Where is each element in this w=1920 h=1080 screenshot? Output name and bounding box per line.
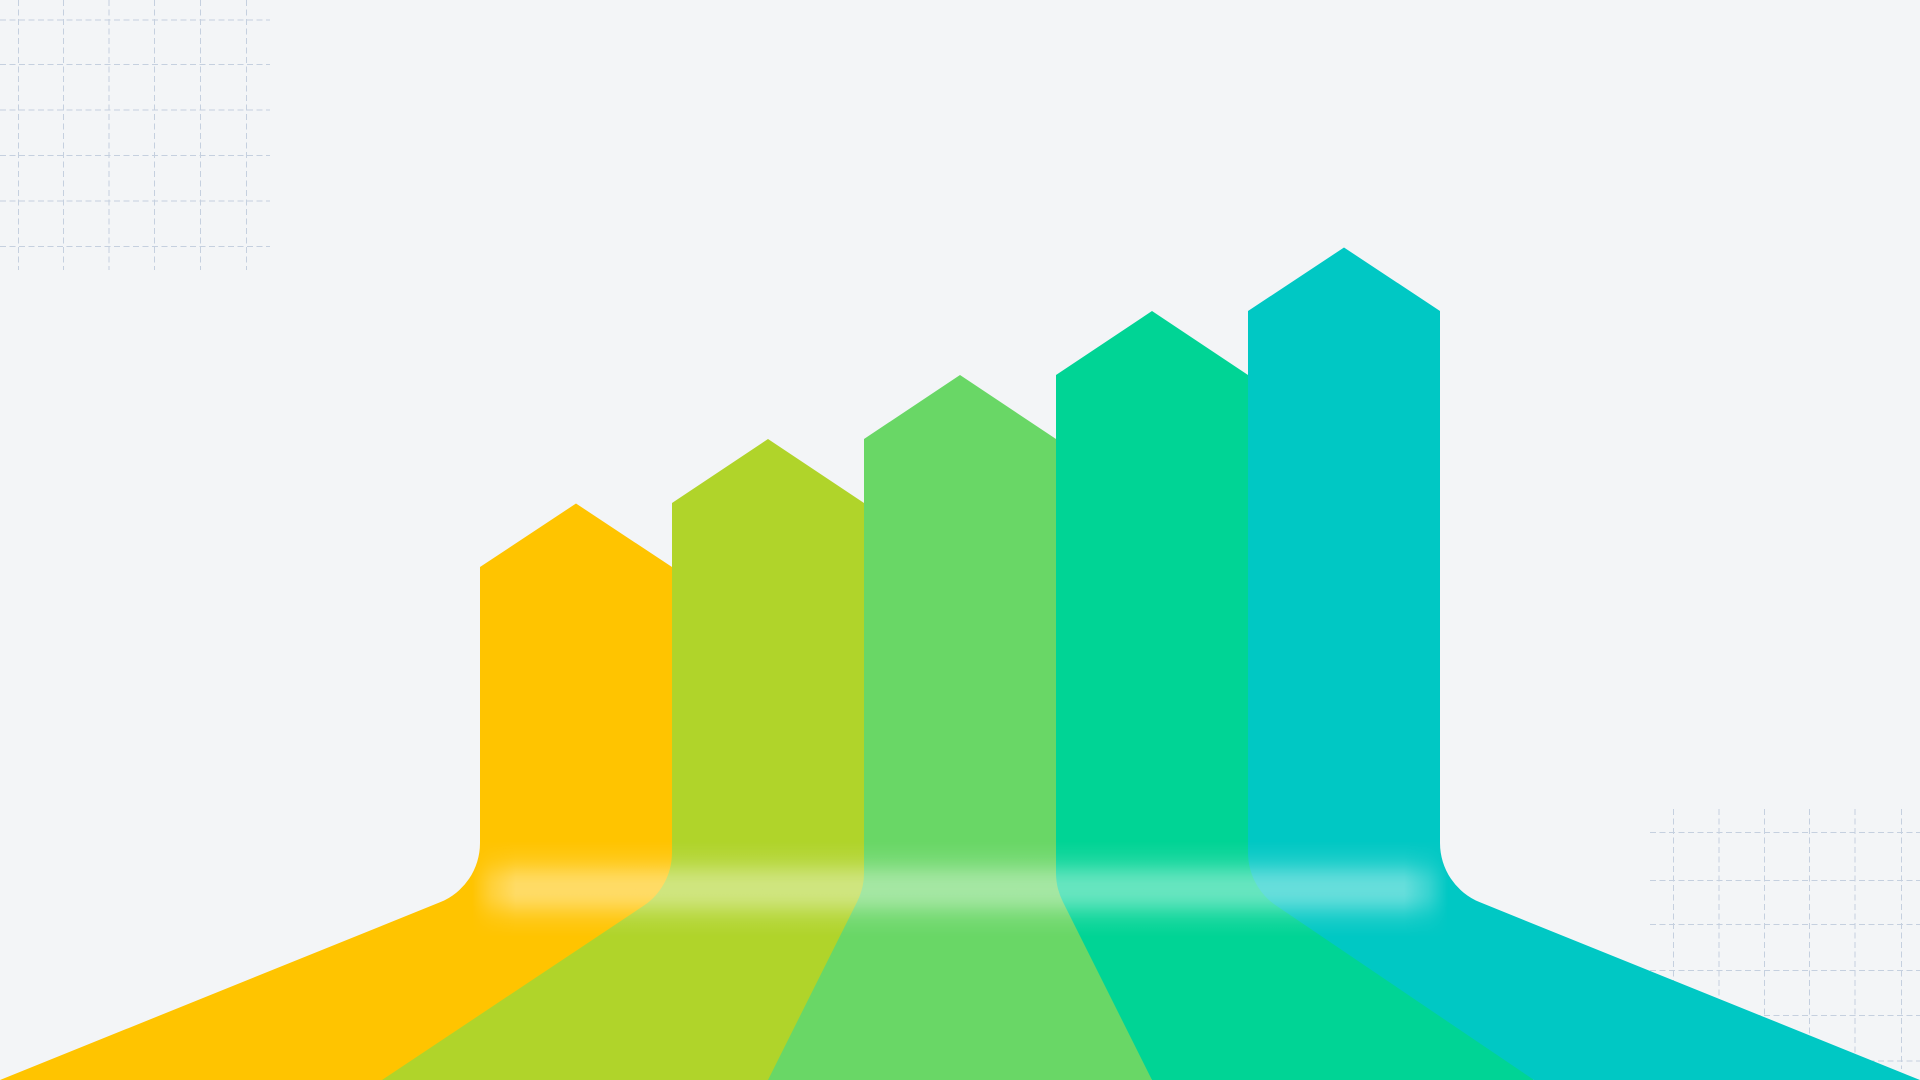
highlight band xyxy=(475,848,1445,930)
arrow 2: lime xyxy=(382,439,864,1080)
arrow 1: yellow xyxy=(0,504,672,1080)
arrow 3: light green xyxy=(768,375,1152,1080)
arrow chart xyxy=(0,248,1920,1080)
arrow 4: green xyxy=(1056,311,1534,1080)
arrow 5: teal xyxy=(1248,248,1920,1080)
